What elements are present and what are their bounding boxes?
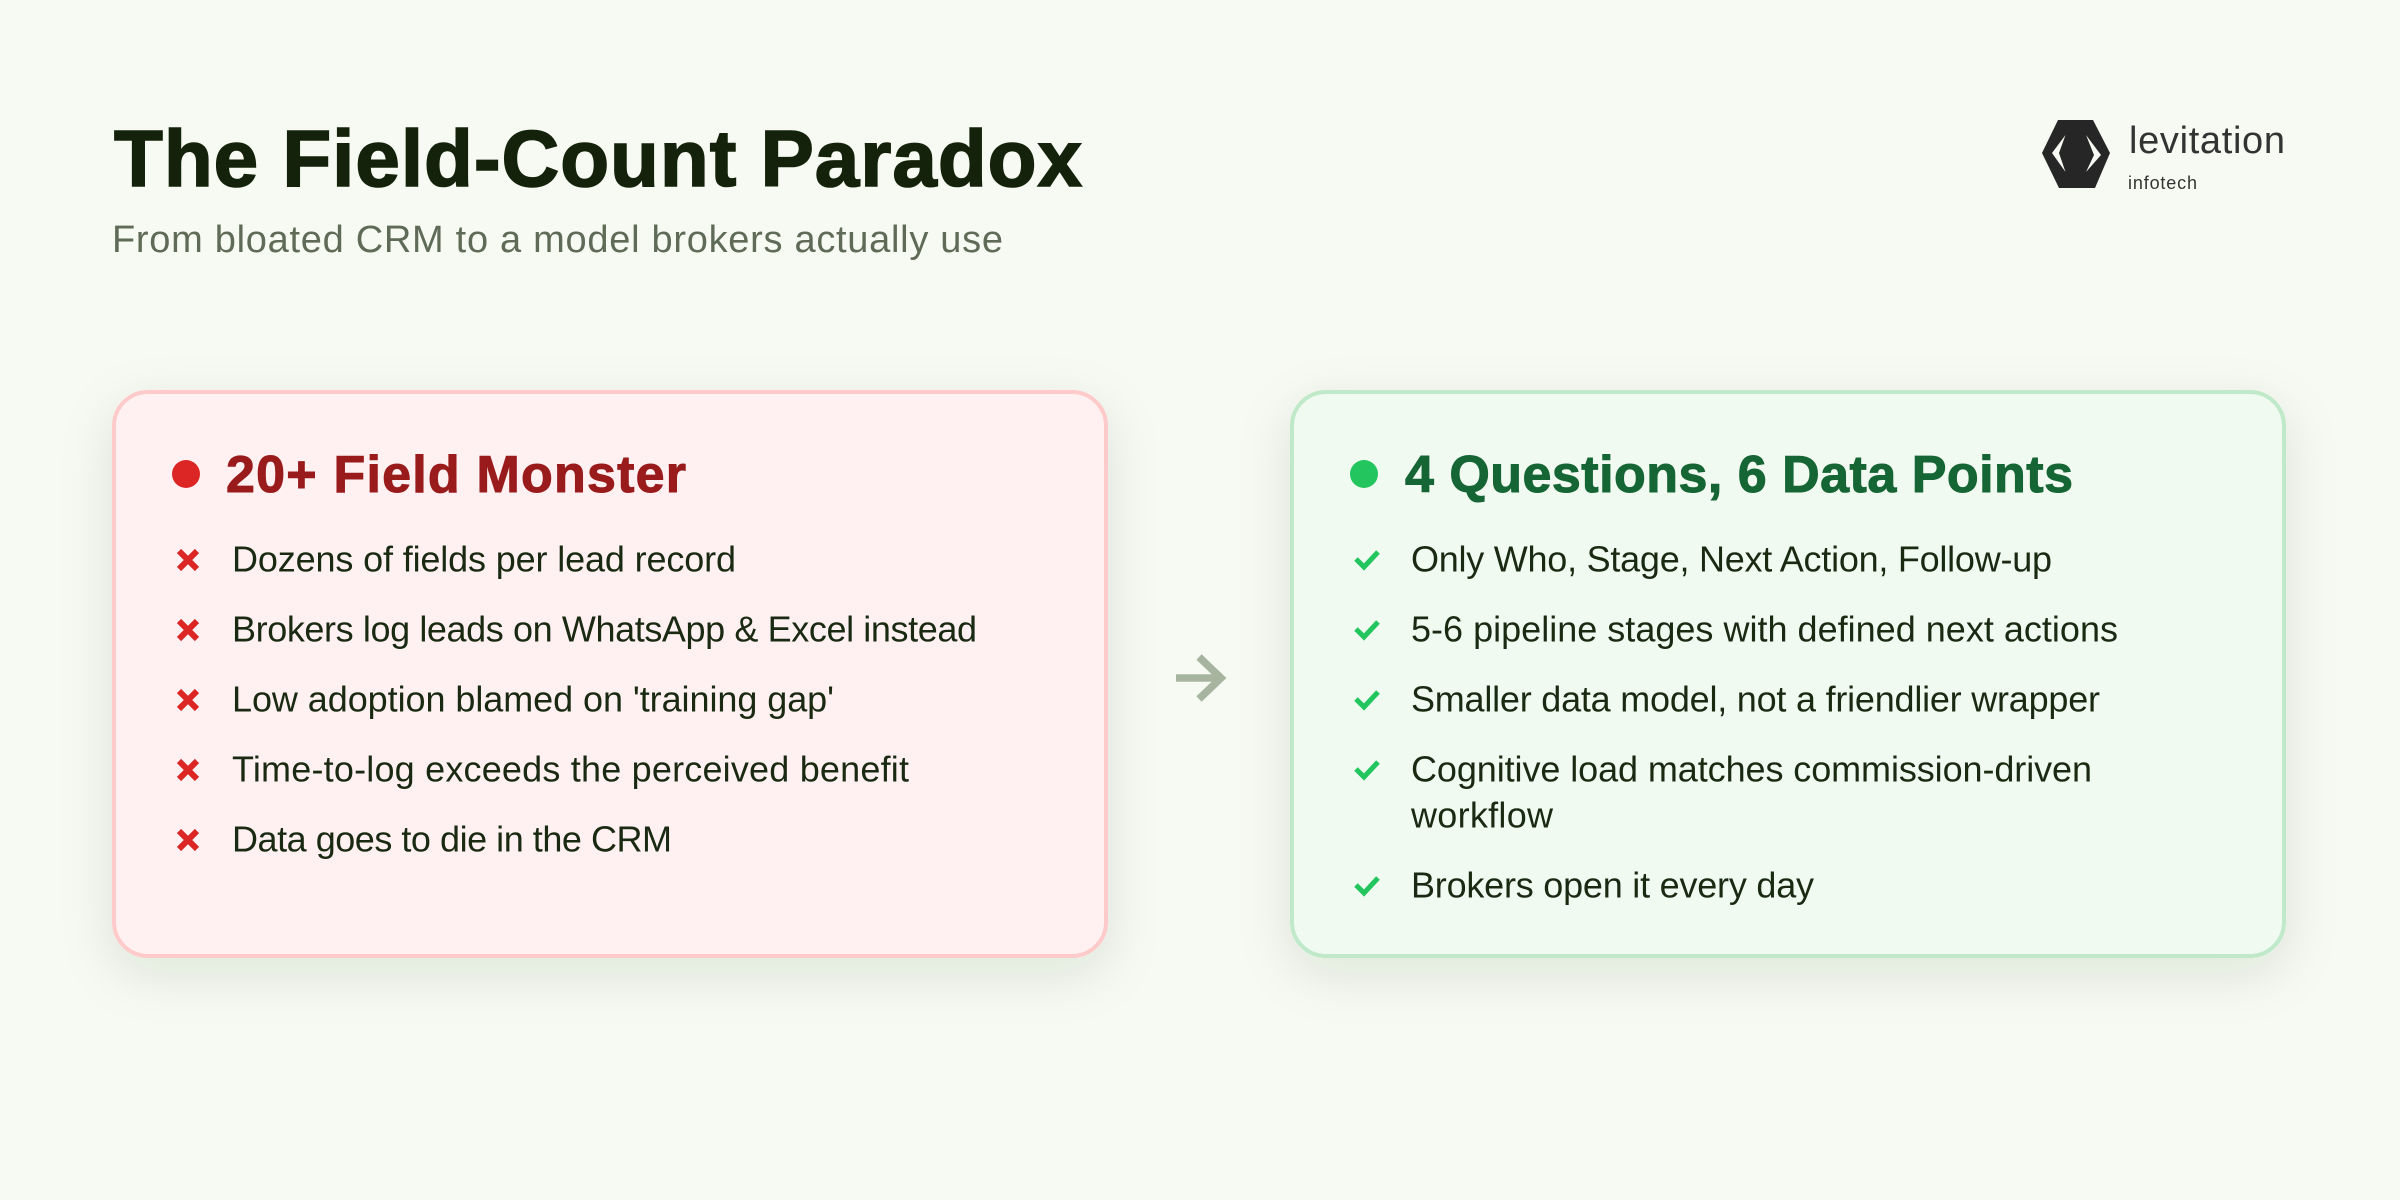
list item 2: Brokers log leads on WhatsApp & Excel instead bbox=[232, 608, 977, 650]
list item 2: 5-6 pipeline stages with defined next actions bbox=[1411, 608, 2118, 650]
icon: cross bbox=[179, 691, 197, 709]
icon: hexagon code brackets bbox=[2042, 120, 2110, 188]
icon: cross bbox=[179, 551, 197, 569]
heading: 4 Questions, 6 Data Points bbox=[1405, 446, 2073, 504]
list item 3: Smaller data model, not a friendlier wrapper bbox=[1411, 678, 2100, 720]
list item 5: Data goes to die in the CRM bbox=[232, 818, 672, 860]
list item 1: Dozens of fields per lead record bbox=[232, 538, 736, 580]
list item 4: Cognitive load matches commission-driven bbox=[1411, 748, 2092, 790]
logo subtext: infotech bbox=[2128, 173, 2197, 193]
list item 1: Only Who, Stage, Next Action, Follow-up bbox=[1411, 538, 2052, 580]
icon: check bbox=[1356, 692, 1378, 707]
arrow bbox=[1176, 657, 1221, 699]
list item 5: Brokers open it every day bbox=[1411, 864, 1814, 906]
list item 4 bbox=[1356, 748, 2092, 836]
status dot: green bbox=[1350, 460, 1378, 488]
icon: check bbox=[1356, 552, 1378, 567]
icon: cross bbox=[179, 761, 197, 779]
logo: levitation infotech bbox=[2042, 120, 2285, 193]
list item 3: Low adoption blamed on 'training gap' bbox=[232, 678, 834, 720]
icon: check bbox=[1356, 622, 1378, 637]
heading: 20+ Field Monster bbox=[226, 446, 686, 504]
title: The Field-Count Paradox bbox=[114, 114, 1082, 203]
panel background bbox=[114, 392, 1106, 956]
header bbox=[112, 114, 1082, 261]
list item 4: Time-to-log exceeds the perceived benefit bbox=[232, 748, 909, 790]
logo wordmark: levitation bbox=[2129, 120, 2285, 162]
icon: check bbox=[1356, 878, 1378, 893]
panel background bbox=[1292, 392, 2284, 956]
icon: cross bbox=[179, 831, 197, 849]
panel: 20+ field monster bbox=[114, 392, 1106, 956]
status dot: red bbox=[172, 460, 200, 488]
subtitle: From bloated CRM to a model brokers actually use bbox=[112, 219, 1003, 261]
icon: cross bbox=[179, 621, 197, 639]
icon: check bbox=[1356, 762, 1378, 777]
list item 4: workflow bbox=[1410, 794, 1554, 836]
panel: 4 questions, 6 data points bbox=[1292, 392, 2284, 956]
